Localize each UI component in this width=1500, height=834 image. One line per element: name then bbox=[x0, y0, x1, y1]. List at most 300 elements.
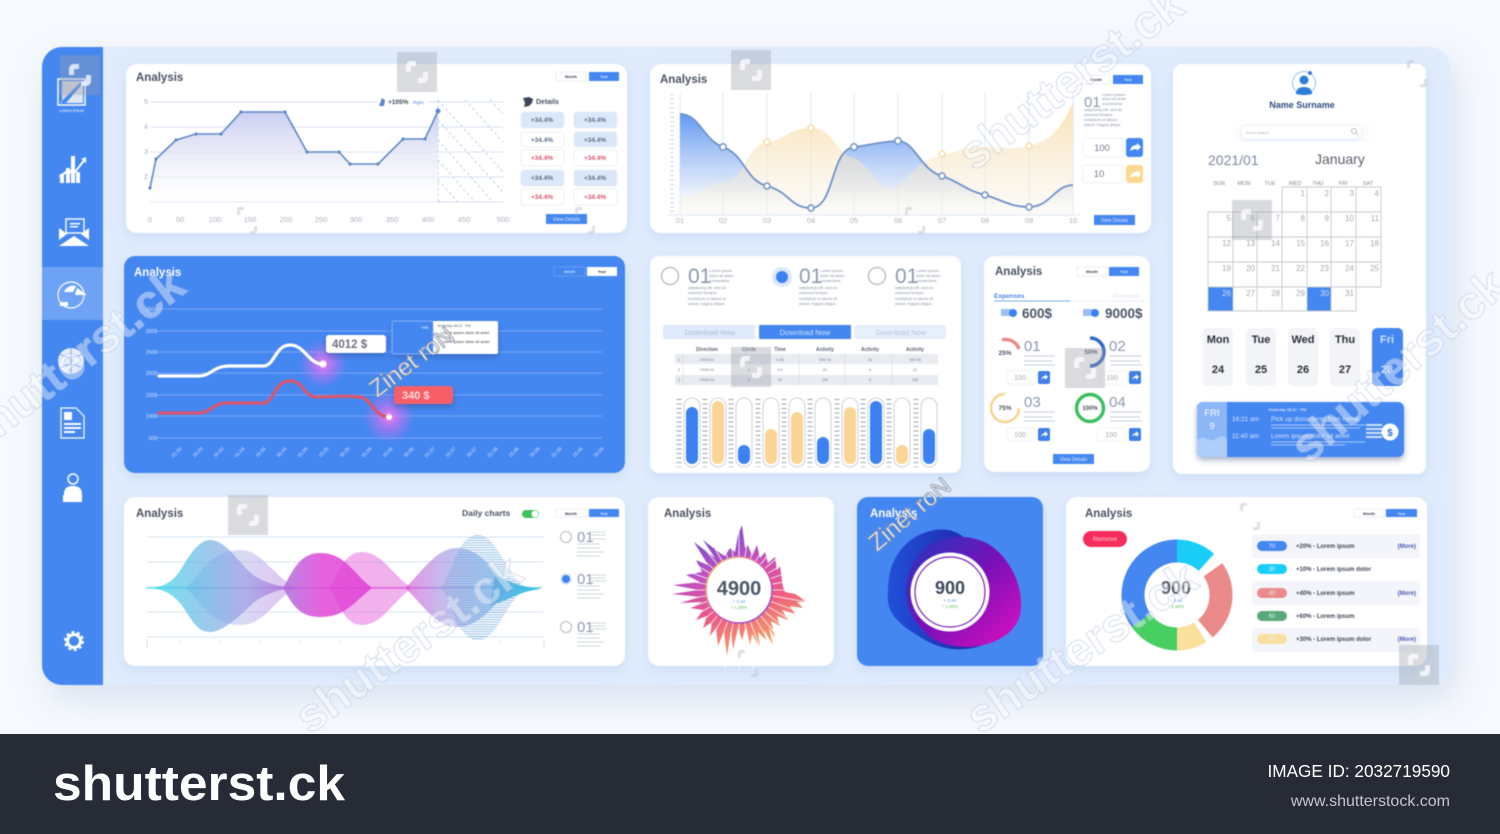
x labels: 07 bbox=[938, 216, 946, 225]
logo wordmark: shutterst.ck bbox=[53, 757, 346, 811]
x axis labels: 50 bbox=[176, 215, 184, 224]
gauge dial: + 1.88% bbox=[731, 605, 747, 610]
grid bbox=[147, 537, 544, 637]
number note: dolore magna aliqua bbox=[1084, 122, 1121, 127]
table: 4 bbox=[869, 368, 871, 372]
date heading bbox=[1208, 151, 1365, 168]
ring 100 percent: 100% bbox=[1082, 406, 1098, 412]
x date labels: 01.06 bbox=[361, 446, 374, 459]
day tiles: 27 bbox=[1339, 364, 1351, 376]
x date labels: 30.08 bbox=[529, 446, 542, 459]
month year toggle: Month bbox=[565, 511, 578, 516]
number note: adipiscing elit, sed do bbox=[1084, 107, 1123, 112]
icon: coin stack: $ bbox=[1387, 428, 1393, 439]
legend list: 30 bbox=[1269, 567, 1276, 573]
blob bbox=[888, 530, 1021, 649]
x date labels: 15.07 bbox=[445, 446, 458, 459]
search box bbox=[1241, 125, 1362, 139]
month year toggle bbox=[556, 509, 619, 517]
calendar grid: 29 bbox=[1296, 289, 1306, 298]
popup: 28 bbox=[422, 345, 427, 350]
radio options: Lorem ipsum bbox=[709, 268, 733, 273]
schedule card bbox=[1197, 402, 1404, 457]
heading: Analysis bbox=[995, 266, 1042, 278]
panel: line chart: 2 bbox=[144, 172, 148, 181]
weekdays: FRI bbox=[1339, 181, 1348, 187]
donut chart: + 1.88% bbox=[1168, 604, 1184, 609]
gauge dial bbox=[912, 554, 988, 630]
legend list: 60 bbox=[1269, 614, 1276, 620]
schedule card: FRI bbox=[1204, 408, 1220, 419]
x labels: 02 bbox=[719, 216, 727, 225]
month year toggle bbox=[554, 267, 617, 276]
details list bbox=[521, 97, 617, 205]
radio options: adipiscing elit, sed do bbox=[895, 285, 934, 290]
y labels: 2000 bbox=[146, 371, 157, 377]
radio options: consectetur bbox=[820, 278, 841, 283]
month year toggle: Month bbox=[564, 269, 575, 274]
day tiles: Tue bbox=[1252, 334, 1270, 346]
legend list: 70 bbox=[1269, 544, 1276, 550]
legend list: (More) bbox=[1398, 591, 1416, 597]
icon: gear bbox=[65, 632, 83, 650]
calendar grid bbox=[1208, 187, 1381, 311]
details list: +34.4% bbox=[584, 137, 606, 144]
wave chart bbox=[145, 535, 541, 640]
month year toggle: Month bbox=[1363, 511, 1376, 516]
view details button: View Details bbox=[553, 217, 581, 223]
calendar grid: 5 bbox=[1227, 214, 1232, 223]
y labels: 1500 bbox=[146, 393, 157, 399]
month year toggle: Year bbox=[598, 269, 607, 274]
watermark overlays: Zinet roN bbox=[364, 322, 459, 403]
details list: Details bbox=[536, 99, 559, 106]
icon: logo bbox=[58, 79, 85, 113]
day tiles bbox=[1203, 328, 1403, 386]
y labels: 3500 bbox=[146, 307, 157, 313]
daily charts switch: Daily charts bbox=[462, 508, 510, 518]
x labels: 09 bbox=[1025, 216, 1033, 225]
x date labels: 15.04 bbox=[255, 446, 268, 459]
data points bbox=[720, 125, 1032, 211]
details list: +34.4% bbox=[531, 194, 553, 201]
month year toggle: Month bbox=[565, 74, 578, 79]
day tiles: Fri bbox=[1380, 334, 1394, 346]
calendar grid: 27 bbox=[1246, 289, 1256, 298]
legend list: +40% - Lorem ipsum bbox=[1296, 591, 1355, 597]
avatar bbox=[1292, 71, 1316, 95]
weekdays: THU bbox=[1312, 181, 1324, 187]
value label red bbox=[394, 386, 453, 404]
callout bbox=[378, 96, 428, 107]
calendar grid: 1 bbox=[1301, 189, 1306, 198]
x axis labels: 0 bbox=[148, 215, 152, 224]
active menu highlight bbox=[42, 267, 103, 320]
month year toggle: Month bbox=[1086, 269, 1099, 274]
blue area bbox=[680, 114, 1073, 215]
schedule card: Pick up documents from home bbox=[1271, 416, 1359, 423]
table: ITEM 01 bbox=[700, 358, 714, 362]
x labels: 03 bbox=[763, 216, 771, 225]
line series bbox=[680, 114, 1073, 208]
table: 209.76 bbox=[909, 358, 921, 362]
number note: incididunt ut labore bbox=[1084, 117, 1118, 122]
radio options: Lorem ipsum bbox=[820, 268, 844, 273]
watermark overlays: Zinet roN bbox=[864, 472, 956, 557]
x labels: 10 bbox=[1069, 216, 1077, 225]
legend list: +10% - Lorem ipsum dolor bbox=[1296, 567, 1372, 573]
glow points bbox=[299, 340, 415, 443]
number note: eiusmod tempor bbox=[1084, 112, 1113, 117]
radio options: adipiscing elit, sed do bbox=[688, 285, 727, 290]
orange area bbox=[680, 103, 1073, 215]
calendar grid: 6 bbox=[1251, 214, 1256, 223]
x axis labels: 200 bbox=[280, 215, 292, 224]
main dashboard background panel bbox=[42, 47, 1450, 685]
value 100 with button: 100 bbox=[1094, 143, 1110, 154]
calendar grid: 26 bbox=[1222, 289, 1232, 298]
radio options bbox=[662, 265, 941, 306]
ring 100 percent: 04 bbox=[1109, 394, 1126, 411]
donut chart: 900 bbox=[1161, 578, 1191, 598]
ring 25 percent: 01 bbox=[1024, 338, 1041, 355]
ring 75 percent: 75% bbox=[998, 405, 1012, 412]
heading: Analysis bbox=[136, 508, 183, 520]
legend list: 30 bbox=[1269, 637, 1276, 643]
remove button bbox=[1083, 531, 1127, 547]
x labels: 06 bbox=[894, 216, 902, 225]
x date labels: 01.07 bbox=[424, 446, 437, 459]
grid bbox=[668, 93, 1080, 215]
gauge dial: + 1.88% bbox=[942, 604, 958, 609]
month year toggle: Year bbox=[600, 74, 609, 79]
day tiles: 24 bbox=[1212, 364, 1225, 376]
search box: Go to search bbox=[1246, 130, 1269, 135]
icon: person at desk bbox=[63, 474, 82, 502]
x date labels: 01.08 bbox=[487, 446, 500, 459]
icon: coin stack bbox=[1366, 424, 1398, 440]
table: 5 bbox=[748, 378, 750, 382]
popup: Lorem ipsum dolor sit amet bbox=[441, 330, 490, 335]
download buttons bbox=[663, 325, 946, 339]
value 100 with button bbox=[1083, 138, 1143, 157]
x date labels: 30.06 bbox=[403, 446, 416, 459]
legend list: +30% - Lorem ipsum dolor bbox=[1296, 637, 1372, 643]
panel: line chart bbox=[126, 64, 627, 233]
month year toggle: Year bbox=[600, 511, 609, 516]
month year toggle bbox=[556, 72, 619, 81]
icon: globe bbox=[58, 348, 84, 374]
calendar grid: 31 bbox=[1345, 289, 1355, 298]
table: Direction bbox=[696, 347, 718, 353]
value buttons: 100 bbox=[1014, 375, 1026, 382]
heading: Analysis bbox=[136, 72, 183, 84]
panel: blue line chart bbox=[124, 256, 625, 473]
calendar grid: 25 bbox=[1370, 264, 1380, 273]
legend list: +20% - Lorem ipsum bbox=[1296, 544, 1355, 550]
day tiles: 25 bbox=[1255, 364, 1267, 376]
x date labels: 01.04 bbox=[234, 446, 247, 459]
area line bbox=[148, 108, 440, 202]
image id: IMAGE ID: 2032719590 bbox=[1268, 761, 1450, 781]
calendar grid: 18 bbox=[1370, 239, 1380, 248]
weekdays: TUE bbox=[1264, 181, 1276, 187]
details list: +34.4% bbox=[584, 117, 606, 124]
panel: calendar profile bbox=[1173, 64, 1426, 474]
day tiles: Mon bbox=[1207, 334, 1230, 346]
table: Time bbox=[774, 347, 786, 353]
calendar grid: 13 bbox=[1246, 239, 1256, 248]
details list: +34.4% bbox=[584, 194, 606, 201]
schedule card: Lorem ipsum dolor sit amet bbox=[1271, 433, 1350, 440]
calendar grid: 7 bbox=[1276, 214, 1281, 223]
value buttons: 100 bbox=[1106, 375, 1118, 382]
number note bbox=[1084, 92, 1127, 127]
totals: 9000$ bbox=[1105, 306, 1143, 321]
tabs: Revenue bbox=[1113, 293, 1139, 300]
y labels: 2500 bbox=[146, 350, 157, 356]
table: 3 bbox=[678, 378, 680, 382]
x axis labels: 300 bbox=[350, 215, 362, 224]
details list: +34.4% bbox=[531, 117, 553, 124]
legend list: 40 bbox=[1269, 591, 1276, 597]
x date labels: 15.03 bbox=[192, 446, 205, 459]
gauge dial: 900 bbox=[935, 578, 965, 598]
details list: +34.4% bbox=[584, 155, 606, 162]
weekdays bbox=[1213, 181, 1374, 187]
x axis labels: 150 bbox=[244, 215, 256, 224]
radio options: dolore magna aliqua bbox=[688, 301, 725, 306]
gauge dial: + 3.44 bbox=[733, 599, 746, 604]
radio options: eiusmod tempor bbox=[895, 290, 924, 295]
table: 100 bbox=[912, 378, 918, 382]
x date labels: 30.05 bbox=[339, 446, 352, 459]
view details button: View Details bbox=[1101, 218, 1129, 224]
download buttons: Download Now bbox=[685, 328, 736, 337]
x labels: 08 bbox=[981, 216, 989, 225]
x date labels: 01.03 bbox=[171, 446, 184, 459]
download buttons: Download Now bbox=[780, 328, 831, 337]
table: 4 bbox=[748, 368, 750, 372]
table: Activity bbox=[861, 347, 879, 353]
ring 50 percent: 50% bbox=[1084, 349, 1098, 356]
table: 100 bbox=[822, 378, 828, 382]
icon: document bbox=[61, 408, 84, 438]
radial burst bbox=[659, 510, 819, 670]
month year toggle bbox=[1077, 267, 1139, 276]
tabs bbox=[994, 293, 1145, 301]
popup: FRI bbox=[422, 325, 428, 330]
x date labels: 30.09 bbox=[593, 446, 606, 459]
icon: logo: LOREM IPSUM bbox=[59, 109, 84, 113]
month year toggle bbox=[1354, 509, 1417, 517]
panel: wave chart bbox=[124, 497, 625, 666]
sidebar bbox=[42, 47, 103, 685]
legend list bbox=[1252, 534, 1420, 652]
details list: +34.4% bbox=[584, 175, 606, 182]
schedule card: Yesterday 08:22 · PM bbox=[1268, 407, 1306, 412]
number note: Lorem ipsum bbox=[1102, 92, 1126, 97]
radio options: 01 bbox=[895, 265, 918, 288]
calendar grid: 22 bbox=[1296, 264, 1306, 273]
popup: Lorem ipsum dolor sit amet bbox=[441, 339, 490, 344]
radio options: dolor sit amet, bbox=[709, 273, 734, 278]
table: Activity bbox=[816, 347, 834, 353]
panel: blue blob gauge bbox=[857, 497, 1043, 666]
month year toggle: Year bbox=[1120, 269, 1129, 274]
red series bbox=[159, 381, 389, 417]
table: 8 bbox=[748, 358, 750, 362]
view details button bbox=[1094, 215, 1135, 225]
calendar grid: 23 bbox=[1320, 264, 1330, 273]
calendar grid: 24 bbox=[1345, 264, 1355, 273]
heading: Analysis bbox=[660, 74, 707, 86]
radio notes: 01 bbox=[577, 571, 594, 588]
table: 20 bbox=[778, 378, 782, 382]
value buttons: 100 bbox=[1014, 432, 1026, 439]
x labels: 04 bbox=[807, 216, 815, 225]
calendar grid: 11 bbox=[1371, 214, 1380, 223]
x axis labels: 450 bbox=[458, 215, 470, 224]
daily charts switch bbox=[462, 508, 539, 518]
totals: 600$ bbox=[1022, 306, 1053, 321]
weekdays: MON bbox=[1238, 181, 1250, 187]
radio options: consectetur bbox=[709, 278, 730, 283]
ring 25 percent: 25% bbox=[998, 350, 1012, 357]
download buttons: Download Now bbox=[876, 328, 927, 337]
table: 9.96 bbox=[776, 358, 784, 362]
x date labels: 01.05 bbox=[297, 446, 310, 459]
calendar grid: 10 bbox=[1345, 214, 1355, 223]
ring 100 percent bbox=[1076, 394, 1126, 422]
x axis labels: 350 bbox=[386, 215, 398, 224]
panel: line chart: 5 bbox=[144, 97, 148, 106]
day tiles: Wed bbox=[1291, 334, 1315, 346]
callout: +105% bbox=[388, 99, 409, 106]
ring 75 percent: 03 bbox=[1024, 394, 1041, 411]
value 10 with button: 10 bbox=[1094, 169, 1104, 180]
calendar grid: 20 bbox=[1246, 264, 1256, 273]
schedule card: 16:21 am bbox=[1232, 416, 1259, 423]
ring 50 percent: 02 bbox=[1109, 338, 1126, 355]
calendar grid: 15 bbox=[1296, 239, 1306, 248]
tabs: Expenses bbox=[994, 293, 1025, 300]
x date labels: 30.04 bbox=[276, 446, 289, 459]
date heading: 2021/01 bbox=[1208, 152, 1259, 168]
radio options: 01 bbox=[688, 265, 711, 288]
x axis labels: 250 bbox=[315, 215, 327, 224]
radio options: 01 bbox=[799, 265, 822, 288]
table: 2 bbox=[678, 368, 680, 372]
month year toggle: Year bbox=[1397, 511, 1406, 516]
table: 5.5 bbox=[777, 368, 783, 372]
calendar grid: 16 bbox=[1320, 239, 1330, 248]
x date labels: 15.06 bbox=[382, 446, 395, 459]
x date labels: 01.09 bbox=[551, 446, 564, 459]
weekdays: SAT bbox=[1363, 181, 1374, 187]
radio options: Lorem ipsum bbox=[916, 268, 940, 273]
number note: 01 bbox=[1084, 94, 1101, 111]
view details button bbox=[1053, 454, 1094, 464]
ring 25 percent bbox=[998, 338, 1041, 357]
icon: envelope bbox=[59, 219, 89, 246]
panel: line chart: 3 bbox=[144, 147, 148, 156]
panel: expenses donuts bbox=[984, 256, 1150, 472]
calendar grid: 17 bbox=[1345, 239, 1355, 248]
gauge dial: + 3.44 bbox=[944, 598, 957, 603]
table: 5 bbox=[869, 378, 871, 382]
dashed forecast bbox=[438, 100, 503, 202]
calendar grid: 3 bbox=[1350, 189, 1355, 198]
x date labels bbox=[171, 446, 606, 459]
panel: radios table bars bbox=[650, 256, 961, 473]
x labels bbox=[676, 216, 1077, 225]
x labels: 01 bbox=[676, 216, 684, 225]
ring 75 percent bbox=[991, 394, 1041, 422]
x date labels: 30.03 bbox=[213, 446, 226, 459]
x axis labels: 400 bbox=[422, 215, 434, 224]
weekdays: SUN bbox=[1213, 181, 1225, 187]
radio options: dolor sit amet, bbox=[820, 273, 845, 278]
radio options: incididunt ut labore et bbox=[688, 296, 727, 301]
legend list: (More) bbox=[1398, 637, 1416, 643]
number note: dolor sit amet bbox=[1102, 96, 1127, 101]
details list: +34.4% bbox=[531, 137, 553, 144]
panel: area chart bbox=[650, 64, 1151, 233]
details list: +34.4% bbox=[531, 175, 553, 182]
name: Name Surname bbox=[1269, 100, 1335, 110]
popup bbox=[392, 321, 498, 354]
vertical gauges bbox=[679, 398, 937, 467]
number note: consectetur bbox=[1102, 101, 1123, 106]
panel: line chart: 4 bbox=[144, 122, 148, 131]
table: 21 bbox=[868, 358, 872, 362]
day tiles: 28 bbox=[1381, 364, 1393, 376]
details list: +34.4% bbox=[531, 155, 553, 162]
radio notes: 01 bbox=[577, 619, 594, 636]
calendar grid: 9 bbox=[1325, 214, 1330, 223]
schedule card: 11:40 am bbox=[1232, 433, 1259, 440]
table: 1 bbox=[678, 358, 680, 362]
calendar grid: 8 bbox=[1301, 214, 1306, 223]
schedule card: 9 bbox=[1209, 421, 1215, 432]
month year toggle bbox=[1082, 75, 1143, 84]
popup: Yesterday 08:22 · PM bbox=[437, 324, 471, 328]
heading: Analysis bbox=[870, 508, 917, 520]
heading: Analysis bbox=[664, 508, 711, 520]
icon: bar chart bbox=[59, 156, 86, 183]
table: ITEM 03 bbox=[700, 378, 714, 382]
month year toggle: Month bbox=[1090, 77, 1103, 82]
white series bbox=[159, 345, 323, 376]
month year toggle: Year bbox=[1124, 77, 1133, 82]
legend list: +60% - Lorem ipsum bbox=[1296, 614, 1355, 620]
axis ticks bbox=[147, 640, 544, 648]
day tiles: 26 bbox=[1297, 364, 1309, 376]
table: 22 bbox=[913, 368, 917, 372]
x date labels: 15.05 bbox=[318, 446, 331, 459]
view details button: View Details bbox=[1060, 457, 1088, 463]
radio options: consectetur bbox=[916, 278, 937, 283]
calendar grid: 4 bbox=[1375, 189, 1380, 198]
heading: Analysis bbox=[1085, 508, 1132, 520]
x date labels: 15.09 bbox=[572, 446, 585, 459]
radio options: dolore magna aliqua bbox=[799, 301, 836, 306]
calendar grid: 12 bbox=[1222, 239, 1232, 248]
radio options: incididunt ut labore et bbox=[799, 296, 838, 301]
legend list: (More) bbox=[1398, 544, 1416, 550]
value 10 with button bbox=[1083, 165, 1143, 183]
